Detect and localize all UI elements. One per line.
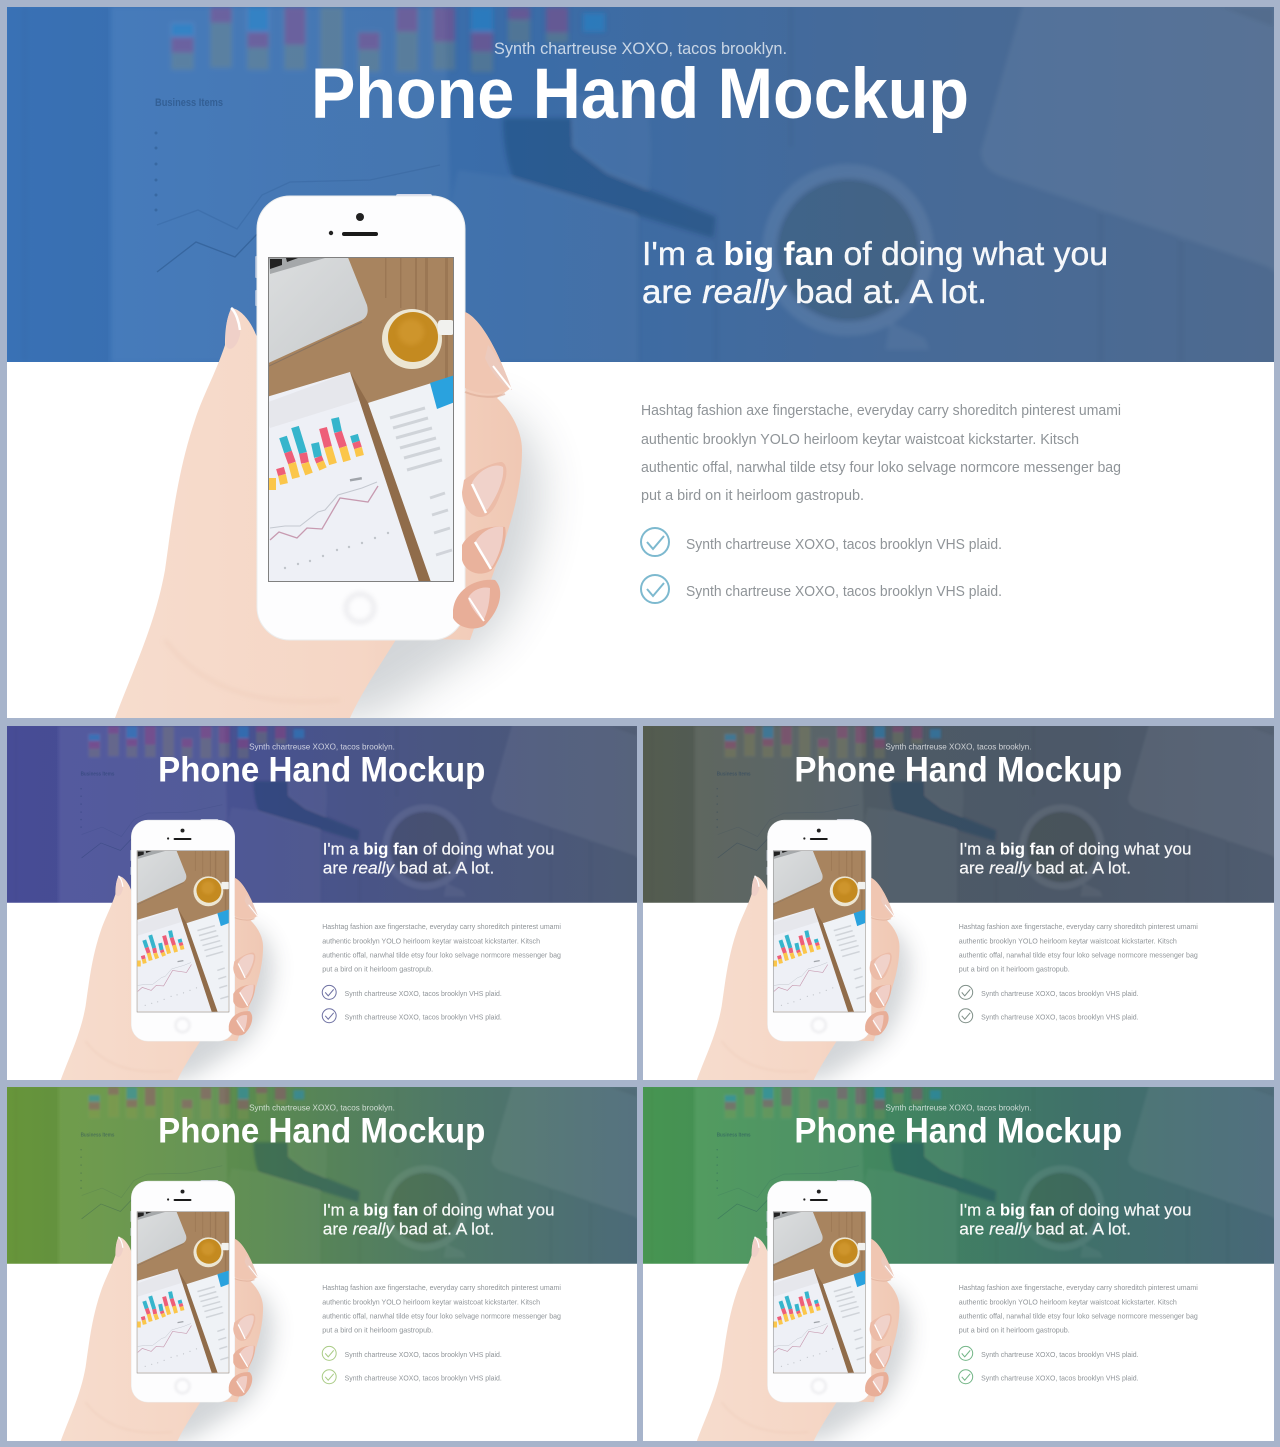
title: Phone Hand Mockup xyxy=(158,750,485,789)
statement headline: I'm a big fan of doing what you xyxy=(323,1201,554,1219)
check item 2 xyxy=(322,1370,502,1384)
body paragraph: put a bird on it heirloom gastropub. xyxy=(641,488,864,504)
body paragraph: authentic offal, narwhal tilde etsy four loko selvage normcore messenger bag xyxy=(959,1312,1198,1321)
statement headline xyxy=(959,1201,1191,1238)
body paragraph xyxy=(959,922,1198,973)
body paragraph: authentic brooklyn YOLO heirloom keytar waistcoat kickstarter. Kitsch xyxy=(641,432,1079,448)
body paragraph: Hashtag fashion axe fingerstache, everyday carry shoreditch pinterest umami xyxy=(322,1283,561,1292)
statement headline: are really bad at. A lot. xyxy=(323,1220,494,1238)
panel: small slide, olive green xyxy=(7,1087,637,1441)
background chart label: Business Items xyxy=(81,771,114,777)
statement headline xyxy=(959,840,1191,877)
background chart label: Business Items xyxy=(717,1132,751,1138)
hand holding phone mockup xyxy=(697,819,910,1080)
check item 2: Synth chartreuse XOXO, tacos brooklyn VHS plaid. xyxy=(345,1012,502,1021)
body paragraph: Hashtag fashion axe fingerstache, everyday carry shoreditch pinterest umami xyxy=(322,922,561,931)
check item 1: Synth chartreuse XOXO, tacos brooklyn VHS plaid. xyxy=(981,1350,1139,1359)
statement headline: I'm a big fan of doing what you xyxy=(642,235,1108,272)
statement headline: are really bad at. A lot. xyxy=(959,859,1131,877)
check item 1: Synth chartreuse XOXO, tacos brooklyn VHS plaid. xyxy=(345,1350,502,1359)
title: Phone Hand Mockup xyxy=(158,1111,485,1150)
subtitle: Synth chartreuse XOXO, tacos brooklyn. xyxy=(886,741,1031,751)
subtitle: Synth chartreuse XOXO, tacos brooklyn. xyxy=(886,1102,1031,1112)
statement headline: are really bad at. A lot. xyxy=(642,273,987,310)
check item 2: Synth chartreuse XOXO, tacos brooklyn VHS plaid. xyxy=(345,1373,502,1382)
body paragraph: authentic offal, narwhal tilde etsy four loko selvage normcore messenger bag xyxy=(322,1312,561,1321)
statement headline xyxy=(323,840,554,877)
check item 1: Synth chartreuse XOXO, tacos brooklyn VHS plaid. xyxy=(345,989,502,998)
hand holding phone mockup xyxy=(61,819,273,1080)
body paragraph xyxy=(641,403,1121,504)
photo background with blue overlay xyxy=(7,0,1280,362)
check item 2 xyxy=(959,1370,1139,1384)
body paragraph: authentic offal, narwhal tilde etsy four loko selvage normcore messenger bag xyxy=(641,460,1121,476)
background chart label: Business Items xyxy=(81,1132,114,1138)
body paragraph xyxy=(322,1283,561,1334)
check item 2: Synth chartreuse XOXO, tacos brooklyn VHS plaid. xyxy=(686,584,1002,600)
body paragraph: authentic brooklyn YOLO heirloom keytar waistcoat kickstarter. Kitsch xyxy=(959,1298,1177,1307)
check item 1 xyxy=(959,985,1139,999)
body paragraph: Hashtag fashion axe fingerstache, everyday carry shoreditch pinterest umami xyxy=(959,1283,1198,1292)
title: Phone Hand Mockup xyxy=(311,55,969,134)
background chart label: Business Items xyxy=(717,771,751,777)
background chart label: Business Items xyxy=(155,97,223,109)
check item 1: Synth chartreuse XOXO, tacos brooklyn VHS plaid. xyxy=(981,989,1139,998)
body paragraph xyxy=(959,1283,1198,1334)
body paragraph: authentic offal, narwhal tilde etsy four loko selvage normcore messenger bag xyxy=(959,951,1198,960)
body paragraph: put a bird on it heirloom gastropub. xyxy=(959,964,1070,973)
statement headline: are really bad at. A lot. xyxy=(959,1220,1131,1238)
check item 1 xyxy=(322,1346,502,1360)
hand holding phone mockup xyxy=(115,194,542,718)
body paragraph: authentic brooklyn YOLO heirloom keytar waistcoat kickstarter. Kitsch xyxy=(322,937,540,946)
check item 2: Synth chartreuse XOXO, tacos brooklyn VHS plaid. xyxy=(981,1373,1139,1382)
check item 1 xyxy=(322,985,502,999)
statement headline xyxy=(323,1201,554,1238)
statement headline xyxy=(642,235,1108,310)
body paragraph: Hashtag fashion axe fingerstache, everyday carry shoreditch pinterest umami xyxy=(959,922,1198,931)
check item 1 xyxy=(959,1346,1139,1360)
subtitle: Synth chartreuse XOXO, tacos brooklyn. xyxy=(494,39,787,58)
check item 2 xyxy=(322,1009,502,1023)
panel: main slide, blue xyxy=(7,7,1274,718)
panel: small slide, green xyxy=(182,1087,1274,1441)
check item 1 xyxy=(641,528,1002,556)
body paragraph: put a bird on it heirloom gastropub. xyxy=(322,1325,433,1334)
panel: small slide, purple xyxy=(7,726,637,1080)
body paragraph: put a bird on it heirloom gastropub. xyxy=(959,1325,1070,1334)
check item 2 xyxy=(641,575,1002,603)
statement headline: I'm a big fan of doing what you xyxy=(323,840,554,858)
body paragraph: put a bird on it heirloom gastropub. xyxy=(322,964,433,973)
check item 2 xyxy=(959,1009,1139,1023)
photo background with green overlay xyxy=(643,1084,1280,1264)
statement headline: I'm a big fan of doing what you xyxy=(959,1201,1191,1219)
subtitle: Synth chartreuse XOXO, tacos brooklyn. xyxy=(249,741,395,751)
title: Phone Hand Mockup xyxy=(794,750,1122,789)
body paragraph: authentic offal, narwhal tilde etsy four loko selvage normcore messenger bag xyxy=(322,951,561,960)
statement headline: I'm a big fan of doing what you xyxy=(959,840,1191,858)
body paragraph: Hashtag fashion axe fingerstache, everyday carry shoreditch pinterest umami xyxy=(641,403,1121,419)
statement headline: are really bad at. A lot. xyxy=(323,859,494,877)
title: Phone Hand Mockup xyxy=(794,1111,1122,1150)
body paragraph: authentic brooklyn YOLO heirloom keytar waistcoat kickstarter. Kitsch xyxy=(959,937,1177,946)
hand holding phone mockup xyxy=(61,1180,273,1441)
check item 2: Synth chartreuse XOXO, tacos brooklyn VHS plaid. xyxy=(981,1012,1139,1021)
subtitle: Synth chartreuse XOXO, tacos brooklyn. xyxy=(249,1102,395,1112)
photo background with purple overlay xyxy=(7,723,645,903)
photo background with slate overlay xyxy=(643,723,1280,903)
body paragraph xyxy=(322,922,561,973)
photo background with olive green overlay xyxy=(7,1084,645,1264)
body paragraph: authentic brooklyn YOLO heirloom keytar waistcoat kickstarter. Kitsch xyxy=(322,1298,540,1307)
panel: small slide, slate xyxy=(182,726,1274,1080)
check item 1: Synth chartreuse XOXO, tacos brooklyn VHS plaid. xyxy=(686,537,1002,553)
hand holding phone mockup xyxy=(697,1180,910,1441)
